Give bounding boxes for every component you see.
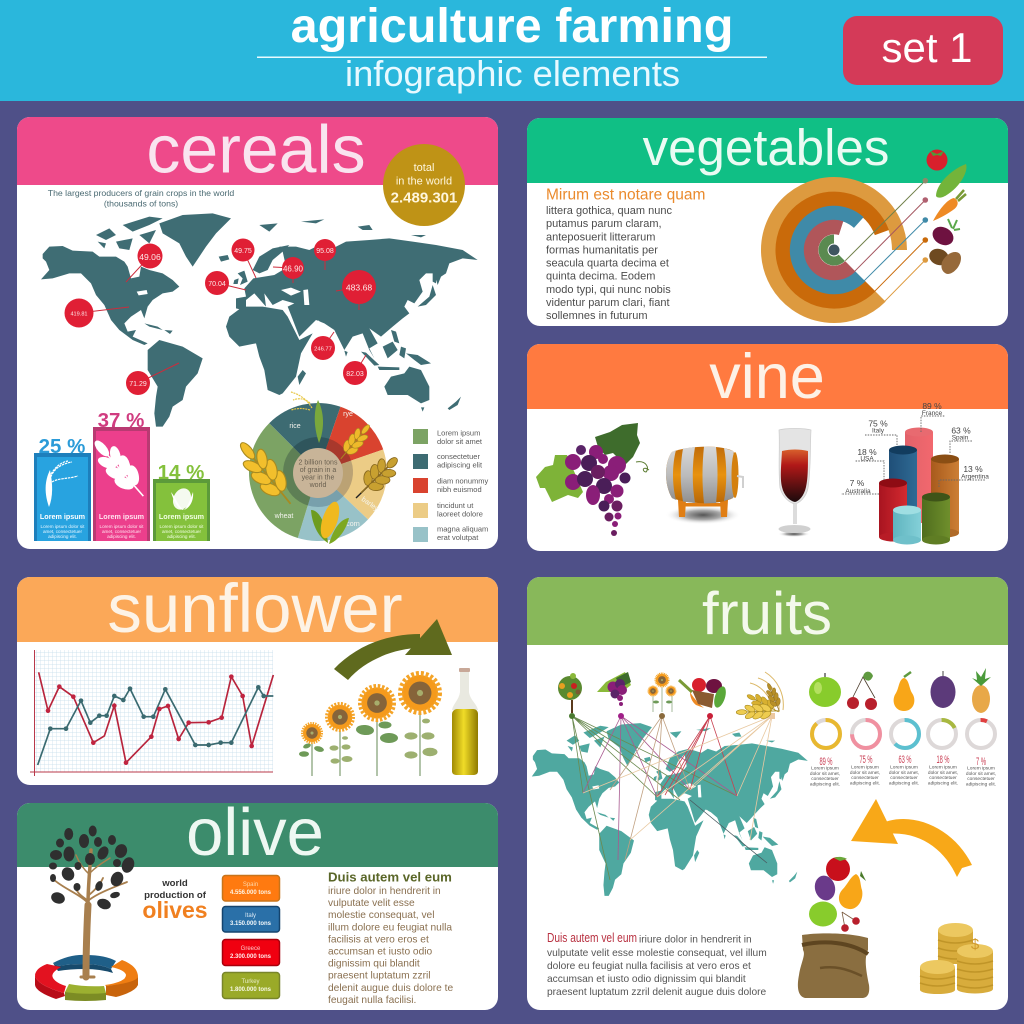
map data bubbles: 82.03	[346, 371, 364, 378]
bar: 14 percent corn: Lorem ipsum	[159, 512, 204, 521]
top banner	[0, 0, 1024, 101]
donut captions: adipiscing elit.	[850, 780, 880, 786]
production tag: Turkey: Turkey	[241, 979, 260, 985]
icon: wine barrel	[665, 446, 743, 524]
donut captions: consectetuer	[967, 776, 995, 782]
vegetables background	[527, 118, 1008, 326]
donut captions: dolor sit amet,	[810, 771, 840, 777]
olive body text: vulputate velit esse	[328, 898, 415, 909]
vegetables body text: modo typi, qui nunc nobis	[546, 284, 671, 296]
icon: gold coins	[920, 923, 993, 994]
total badge: 2.489.301	[391, 190, 457, 206]
donut captions: dolor sit amet,	[850, 770, 880, 776]
map data bubbles	[64, 238, 376, 395]
production tag: Greece: 2.300.000 tons	[230, 954, 272, 960]
olive body text: illum dolore eu feugiat nulla	[328, 922, 452, 933]
icon: small sunflowers	[648, 673, 676, 712]
olive background	[17, 803, 498, 1010]
fruits text block: praesent luptatum zzril delenit augue duis dolore	[547, 987, 766, 998]
icon: pear	[894, 672, 914, 711]
icon: wine glass	[778, 428, 811, 537]
world map: fruits	[532, 723, 808, 896]
map caption: (thousands of tons)	[104, 198, 178, 208]
donut captions: 63 %	[898, 754, 912, 766]
panel: sunflower	[17, 570, 498, 785]
cylinder chart: wine producers: 13 %	[963, 464, 983, 474]
title: agriculture farming	[291, 0, 733, 53]
donut captions: consectetuer	[851, 775, 879, 781]
bar: 25 percent rice: 25 %	[39, 435, 85, 458]
olive body text: molestie consequat, vel	[328, 910, 434, 921]
production tag: Greece	[222, 940, 280, 966]
cylinder chart: wine producers: 63 %	[951, 426, 971, 436]
vegetables body text: formas humanitatis per	[546, 244, 658, 256]
icon: apple	[809, 673, 841, 707]
production tag: Spain: Spain	[243, 882, 258, 888]
vegetables body text: littera gothica, quam nunc	[546, 205, 672, 217]
cylinder chart: wine producers: 7 %	[850, 478, 865, 488]
tree trunk	[52, 850, 127, 977]
world production heading: production of	[144, 890, 207, 901]
pie chart: grain crops: rye	[343, 411, 353, 418]
legend: erat volutpat	[437, 533, 479, 542]
icon: rice	[46, 461, 78, 507]
icon: oil bottle	[452, 668, 478, 775]
map data bubbles: 419.81	[70, 312, 88, 318]
fruits text block: vulputate velit esse molestie consequat, vel illum	[547, 948, 767, 959]
arrow: orange	[851, 799, 972, 877]
donut captions: dolor sit amet,	[889, 770, 919, 776]
olive body text: dignissim qui blandit	[328, 959, 420, 970]
legend: nibh euismod	[437, 485, 482, 494]
bar: 37 percent wheat: amet, consectetuer	[102, 529, 141, 534]
pie chart: grain crops: world	[309, 482, 326, 489]
olive body text: praesent luptatum zzril	[328, 971, 430, 982]
bar: 25 percent rice: Lorem ipsum dolor sit	[41, 524, 85, 529]
legend	[413, 428, 489, 542]
icon: cucumber	[936, 164, 966, 198]
arrow: olive green	[334, 619, 452, 680]
donut captions: Lorem ipsum	[929, 764, 957, 770]
olive body text: accumsan et iusto odio	[328, 946, 433, 958]
donut captions: Lorem ipsum	[890, 764, 918, 770]
icon: rice stalk	[291, 392, 323, 443]
fruits text block: iriure dolor in hendrerit in	[639, 934, 752, 946]
cereals header	[17, 117, 498, 185]
cylinder chart: wine producers: Spain	[952, 434, 969, 442]
bar: 37 percent wheat	[85, 409, 155, 541]
panel: vegetables	[527, 118, 1008, 326]
donut charts	[812, 720, 995, 748]
donut captions: consectetuer	[890, 775, 918, 781]
vine heading: vine	[709, 342, 825, 412]
vegetables subheading: Mirum est notare quam	[546, 186, 705, 204]
bar: 37 percent wheat: Lorem ipsum dolor sit	[100, 524, 144, 529]
donut captions: 18 %	[936, 754, 950, 766]
total badge: in the world	[396, 176, 452, 188]
fruits text block: dolore eu feugiat nulla facilisis at vero eros et	[547, 961, 751, 972]
icon: fruit tree	[558, 673, 582, 713]
production tag: Italy: 3.150.000 tons	[230, 921, 272, 927]
vegetables heading: vegetables	[643, 119, 889, 176]
map data bubbles: 70.04	[208, 281, 226, 288]
olive body text: feugait nulla facilisi.	[328, 995, 416, 1006]
cylinder chart: wine producers: USA	[860, 456, 874, 462]
bar: 25 percent rice	[34, 435, 91, 541]
icon: cherries	[847, 672, 877, 710]
vegetables header	[527, 118, 1008, 183]
map data bubbles: 49.06	[139, 252, 161, 262]
legend: Lorem ipsum	[437, 428, 480, 438]
bar: 25 percent rice: amet, consectetuer	[43, 529, 82, 534]
cylinder chart: wine producers: Australia	[845, 488, 871, 495]
legend: diam nonummy	[437, 476, 489, 486]
panel: olive	[17, 795, 498, 1010]
icon: barley ear	[351, 448, 407, 503]
icon: rye ear	[334, 419, 376, 465]
legend: adipiscing elit	[437, 460, 483, 470]
icon: small vegetables	[679, 678, 728, 709]
pie chart: grain crops: corn	[346, 521, 360, 528]
icon: small grapes	[597, 672, 631, 706]
donut captions: 89 %	[820, 756, 833, 768]
ring segment green	[65, 984, 106, 1001]
cereals heading: cereals	[146, 112, 366, 188]
donut captions: dolor sit amet,	[928, 770, 958, 776]
icon: corn cob	[311, 500, 349, 544]
banner background	[0, 0, 1024, 101]
total badge: total	[414, 162, 434, 174]
bar: 14 percent corn: Lorem ipsum dolor sit	[160, 524, 204, 529]
legend: magna aliquam	[437, 524, 488, 534]
total badge	[383, 144, 465, 226]
fruits header	[527, 577, 1008, 645]
icon: small wheat	[736, 672, 785, 721]
bar: 25 percent rice: adipiscing elit.	[48, 534, 77, 539]
vegetables body text: anteposuerit litterarum	[546, 231, 655, 243]
fruits text block: accumsan et iusto odio dignissim qui blandit	[547, 974, 746, 985]
olive body text: delenit augue duis dolore te	[328, 983, 454, 994]
olive body text: facilisis at vero eros et	[328, 934, 429, 945]
sunflower header	[17, 577, 498, 642]
pie chart: grain crops: year in the	[302, 474, 334, 482]
legend: laoreet dolore	[437, 510, 483, 518]
olive subheading: Duis autem vel eum	[328, 870, 452, 884]
bar: 14 percent corn: adipiscing elit.	[167, 534, 196, 539]
bar: 25 percent rice: Lorem ipsum	[40, 512, 85, 521]
fruits background	[527, 577, 1008, 1010]
sunflower background	[17, 577, 498, 785]
map caption: The largest producers of grain crops in the world	[48, 188, 234, 198]
donut captions: adipiscing elit.	[928, 780, 958, 786]
ring segment red	[35, 964, 66, 999]
production tag: Greece: Greece	[241, 946, 261, 952]
badge: set 1: set 1	[881, 24, 973, 71]
icon: beet	[929, 219, 960, 249]
pie chart: grain crops: barley	[360, 496, 380, 513]
bar: 14 percent corn: 14 %	[158, 461, 204, 484]
map data bubbles: 95.08	[316, 248, 334, 255]
cereals background	[17, 117, 498, 549]
world production heading	[142, 878, 208, 923]
pie chart: grain crops: 2 billion tons	[299, 460, 338, 466]
legend: tincidunt ut	[437, 501, 474, 510]
vegetables body text: quinta decima. Eodem	[546, 271, 655, 283]
vegetables body text: seacula quarta decima et	[546, 258, 669, 270]
donut captions: adipiscing elit.	[810, 782, 840, 788]
line chart	[30, 650, 273, 776]
icon: sack	[798, 933, 869, 998]
cylinder chart: wine producers: 89 %	[922, 401, 942, 411]
fruits text block	[547, 930, 767, 998]
vegetables body text: sollemnes in futurum	[546, 310, 648, 322]
pie chart: grain crops	[229, 392, 407, 544]
icon: plum	[930, 671, 956, 708]
world map	[41, 213, 478, 427]
production tag: Spain	[222, 876, 280, 901]
pie chart: grain crops: of grain in a	[300, 467, 336, 474]
fruits text block: Duis autem vel eum	[547, 930, 637, 945]
map data bubbles: 46.90	[283, 264, 304, 274]
donut captions: Lorem ipsum	[967, 766, 995, 772]
olives	[49, 826, 136, 911]
donut captions	[810, 754, 996, 788]
cylinder chart: wine producers: France	[922, 410, 942, 417]
cylinder chart: wine producers: 75 %	[868, 418, 888, 428]
donut captions: adipiscing elit.	[889, 780, 919, 786]
panel: vine	[527, 342, 1008, 551]
production tag: Italy: Italy	[245, 913, 256, 919]
bar: 37 percent wheat: Lorem ipsum	[99, 512, 144, 521]
production tag: Spain: 4.556.000 tons	[230, 890, 272, 896]
icon: pineapple	[972, 668, 991, 713]
map data bubbles: 49.75	[234, 248, 252, 255]
legend: consectetuer	[437, 452, 480, 461]
map data bubbles: 246.77	[314, 346, 332, 352]
donut captions: Lorem ipsum	[851, 764, 879, 770]
panel: cereals	[17, 112, 498, 549]
pie chart: grain crops: wheat	[274, 513, 293, 520]
cylinder chart: wine producers: Italy	[872, 428, 885, 434]
vegetables body text: putamus parum claram,	[546, 218, 662, 230]
world production heading: world	[161, 878, 188, 889]
vine header	[527, 344, 1008, 409]
connector lines	[569, 713, 775, 880]
sunflower heading: sunflower	[107, 570, 403, 647]
donut captions: 75 %	[860, 754, 873, 766]
icon: potatoes	[927, 246, 961, 274]
icon: grapes	[536, 423, 649, 536]
donut captions: 7 %	[976, 756, 986, 768]
radial bar chart	[769, 178, 928, 315]
cylinder chart: wine producers: 18 %	[857, 447, 877, 457]
icon: carrot	[933, 190, 966, 221]
production tag: Turkey	[222, 972, 280, 998]
bar: 37 percent wheat: adipiscing elit.	[107, 534, 136, 539]
icon: falling fruits	[809, 857, 866, 932]
icon: wheat ear	[229, 433, 303, 514]
production tag: Italy	[222, 906, 280, 932]
bar: 14 percent corn: amet, consectetuer	[162, 529, 201, 534]
olive heading: olive	[186, 795, 324, 870]
vegetables body text: videntur parum clari, fiant	[546, 297, 670, 309]
icon: gold coins: $	[971, 936, 980, 953]
pie chart: grain crops: rice	[289, 423, 301, 430]
vine background	[527, 344, 1008, 551]
production tag: Turkey: 1.800.000 tons	[230, 987, 272, 993]
donut captions: Lorem ipsum	[811, 766, 839, 772]
subtitle: infographic elements	[345, 53, 680, 94]
world production heading: olives	[142, 897, 208, 923]
donut captions: dolor sit amet,	[966, 771, 996, 777]
icon: wheat	[85, 432, 155, 506]
panel: fruits	[527, 577, 1008, 1010]
donut captions: consectetuer	[929, 775, 957, 781]
icon: olive tree and ring	[35, 826, 138, 1001]
map data bubbles: 483.68	[346, 282, 372, 292]
badge: set 1	[843, 16, 1003, 85]
bar: 37 percent wheat: 37 %	[98, 409, 144, 432]
legend: dolor sit amet	[437, 437, 483, 446]
donut captions: consectetuer	[811, 776, 839, 782]
fruits heading: fruits	[702, 580, 832, 647]
olive header	[17, 803, 498, 867]
donut captions: adipiscing elit.	[966, 782, 996, 788]
cylinder chart: wine producers: Argentina	[961, 474, 989, 480]
icon: sunflowers	[299, 674, 439, 776]
ring segment blue	[53, 955, 116, 973]
olive body text: iriure dolor in hendrerit in	[328, 886, 441, 897]
map data bubbles: 71.29	[129, 381, 147, 388]
cylinder chart: wine producers	[841, 401, 989, 544]
icon: tomato	[926, 150, 948, 170]
bar: 14 percent corn	[153, 461, 210, 541]
icon: corn	[170, 485, 194, 513]
ring segment orange	[105, 960, 138, 997]
